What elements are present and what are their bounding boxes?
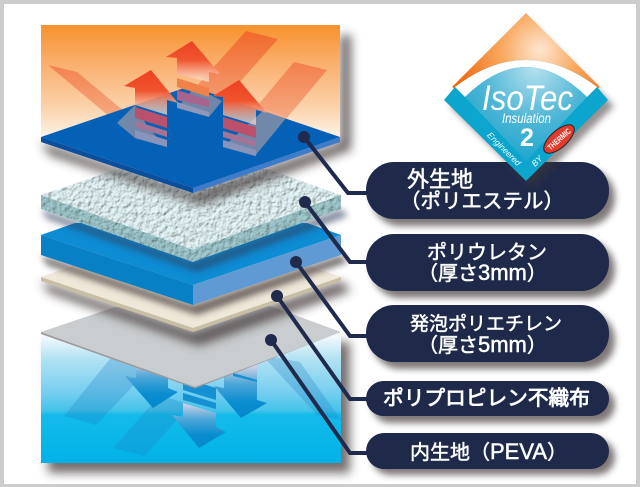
blue foam shadow — [41, 255, 348, 315]
by text: BY — [529, 152, 545, 168]
pill — [366, 305, 609, 362]
orange top diamond — [452, 13, 600, 130]
left arrow head — [124, 70, 178, 115]
leader line: nonwoven — [271, 290, 370, 399]
logo: IsoTec Insulation 2 badge — [444, 13, 614, 187]
thermic oval logo — [539, 120, 579, 158]
text: ポリプロピレン不織布 — [383, 387, 590, 410]
right arrow stripes — [223, 117, 256, 138]
plate top — [41, 86, 340, 188]
grade number: 2 — [520, 124, 534, 152]
arrow: cold down centre — [172, 403, 226, 448]
arrow: heat up centre — [166, 41, 220, 117]
line 1: ポリウレタン — [427, 241, 547, 264]
foam shadow — [41, 209, 348, 272]
oval — [539, 120, 579, 158]
text: 内生地（PEVA） — [410, 439, 567, 464]
centre arrow head — [166, 41, 220, 82]
line 2: （厚さ3mm） — [418, 260, 547, 285]
blue outer fabric plate — [41, 86, 340, 193]
inner light panel — [465, 67, 587, 161]
arrow: cold down right — [214, 365, 267, 418]
leader line: inner fabric — [265, 334, 370, 453]
label: polypropylene nonwoven — [366, 381, 609, 416]
foam textured top — [42, 169, 341, 250]
grey sheet edge — [41, 332, 341, 388]
beige shadow — [41, 281, 351, 346]
beige edge — [41, 277, 341, 332]
badge shadow — [450, 24, 614, 187]
blue foam top — [41, 223, 341, 285]
leader line: outer fabric — [298, 131, 370, 193]
arrow: heat up left — [124, 70, 178, 147]
line 2: （厚さ5mm） — [418, 332, 547, 357]
layer: grey PEVA sheet — [41, 306, 341, 388]
layer: polyurethane foam — [41, 165, 348, 272]
layer: blue polyethylene foam — [41, 223, 348, 315]
pill — [366, 234, 609, 291]
pill shadows — [372, 169, 615, 475]
label: inner fabric PEVA — [366, 433, 609, 469]
translucent cold bands — [64, 355, 341, 456]
left arrow stripes — [135, 107, 167, 128]
panel: outer fabric hot side — [41, 25, 351, 205]
panel and plate shadow — [41, 35, 351, 205]
cold gradient background — [41, 332, 341, 463]
label: polyurethane 3mm — [366, 234, 609, 291]
translucent bands over plate — [117, 87, 287, 156]
thermic wordmark: THERMIC — [546, 127, 573, 152]
plate right edge — [193, 137, 340, 193]
arrow: cold down left — [125, 360, 178, 408]
hot gradient background — [41, 25, 340, 139]
arrow: heat up right — [213, 80, 267, 156]
centre arrow stripes — [177, 78, 209, 97]
leader line: polyurethane — [299, 196, 370, 262]
insulation label: Insulation — [502, 111, 551, 126]
white arc — [455, 60, 597, 97]
beige surface — [41, 265, 341, 328]
panel shadow — [48, 342, 350, 473]
line 1: 外生地 — [407, 167, 473, 192]
layer: beige nonwoven — [41, 265, 351, 346]
panel: inner fabric cold side — [41, 332, 350, 473]
grey sheet surface — [41, 306, 341, 387]
hot light bands — [48, 31, 327, 156]
label: polyethylene foam 5mm — [366, 305, 609, 362]
cold stripes — [183, 373, 257, 409]
blue foam left face — [41, 235, 193, 305]
blue badge base — [444, 60, 608, 181]
line 1: 発泡ポリエチレン — [410, 313, 562, 335]
engineered text: Engineered — [485, 130, 523, 168]
plate left edge — [41, 137, 193, 193]
blue foam right face — [193, 235, 341, 305]
pill — [366, 433, 609, 469]
leader line: polyethylene foam — [290, 256, 370, 336]
raised blue centre column — [167, 100, 223, 150]
pill — [366, 162, 609, 219]
label: outer fabric polyester — [366, 162, 609, 219]
pill — [366, 381, 609, 416]
foam textured side — [41, 195, 341, 262]
line 2: （ポリエステル） — [400, 190, 564, 213]
brand name: IsoTec — [482, 79, 573, 118]
right arrow head — [213, 80, 267, 125]
